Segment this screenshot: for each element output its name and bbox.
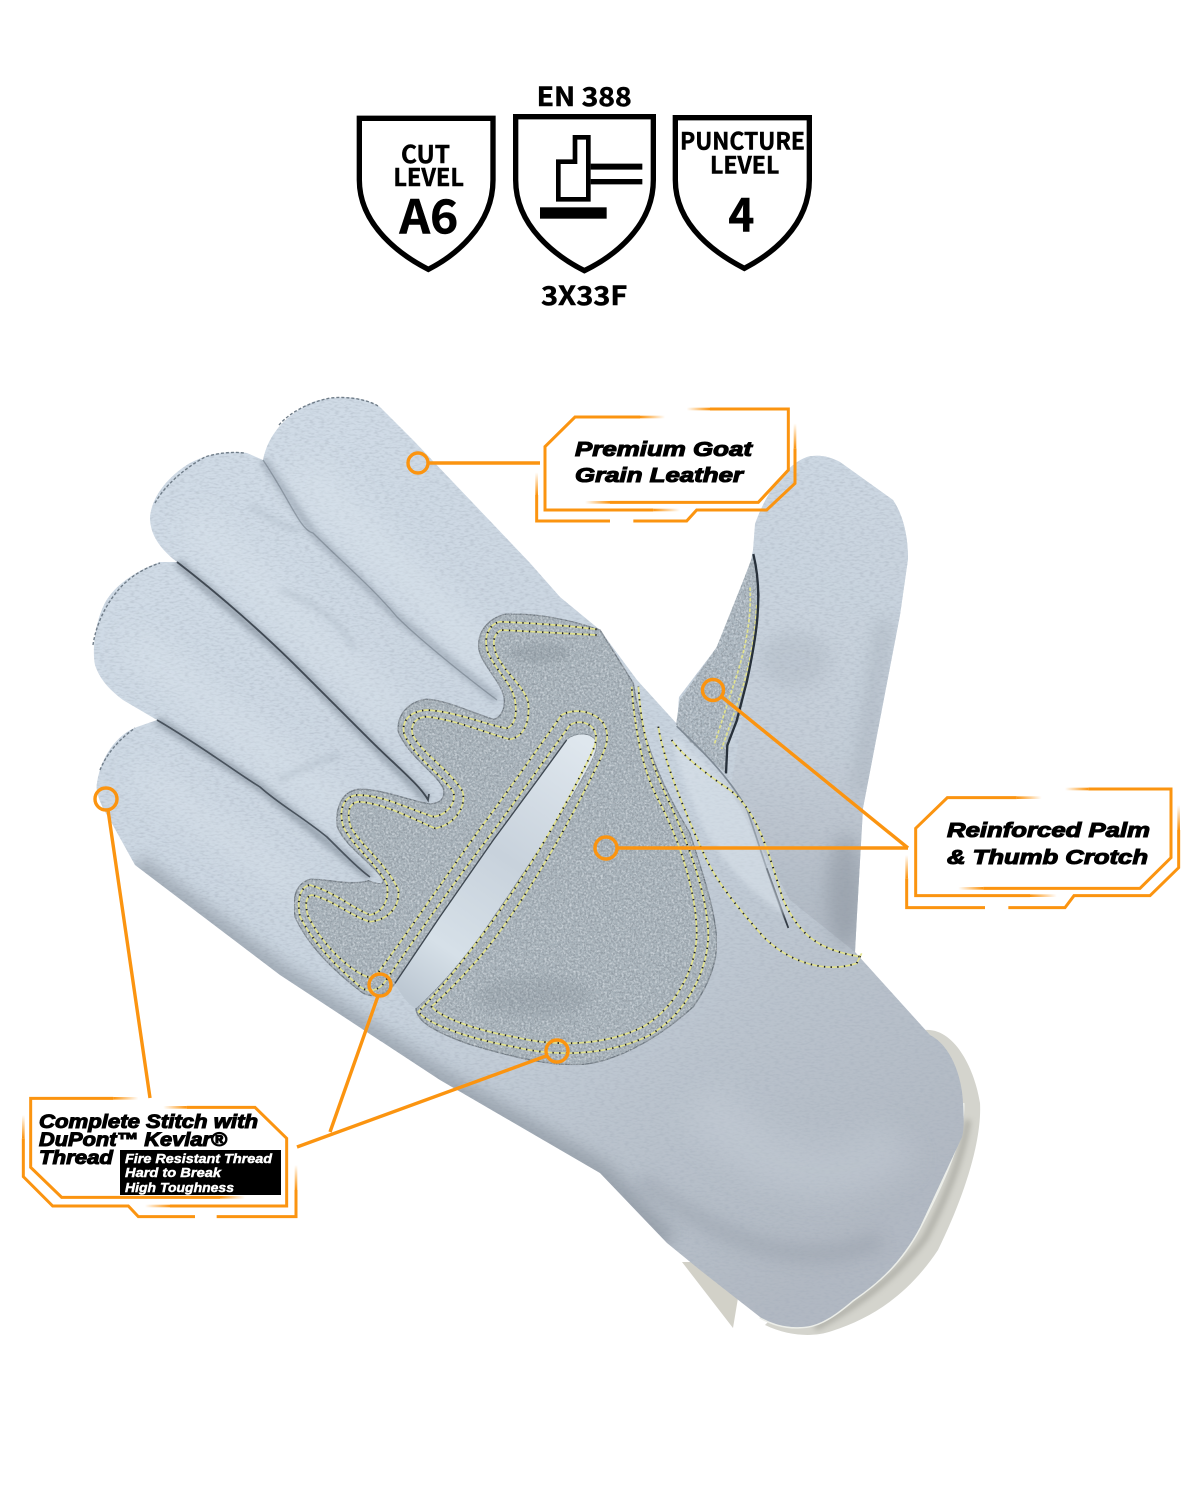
marker: lower patch stitch bbox=[297, 1040, 568, 1147]
marker: palm edge stitch bbox=[330, 974, 391, 1132]
palm reinforcement patch bbox=[294, 614, 862, 1065]
glove cuff and tab bbox=[682, 1030, 980, 1335]
black feature box bbox=[120, 1150, 281, 1195]
glove photo illustration bbox=[93, 397, 980, 1335]
fingertip stitching bbox=[93, 397, 378, 770]
certification shields bbox=[359, 77, 809, 313]
callout: premium goat grain leather: Grain Leather bbox=[575, 465, 745, 487]
callout: premium goat grain leather bbox=[535, 408, 796, 521]
shield: cut level A6: CUT bbox=[401, 135, 450, 170]
glove leather body bbox=[94, 397, 964, 1327]
heading: EN 388: EN 388 bbox=[537, 77, 632, 114]
thumb crotch reinforcement patch bbox=[676, 554, 788, 928]
shield: EN 388 hammer pictogram bbox=[516, 117, 653, 271]
callout: complete stitch with kevlar thread: DuPont™ Kevlar® bbox=[39, 1130, 227, 1151]
slit in palm patch bbox=[395, 734, 596, 1008]
leather shading bbox=[130, 460, 900, 1254]
kevlar stitching bbox=[299, 622, 862, 1053]
shield: puncture level 4: PUNCTURE bbox=[680, 122, 805, 156]
callout: reinforced palm and thumb crotch: Reinforced Palm bbox=[947, 820, 1150, 842]
black feature box: High Toughness bbox=[125, 1180, 234, 1195]
marker: pinky stitch bbox=[95, 788, 150, 1098]
shield: puncture level 4: LEVEL bbox=[710, 146, 779, 180]
shield: cut level A6 bbox=[359, 118, 493, 269]
callout: reinforced palm and thumb crotch: & Thumb Crotch bbox=[947, 847, 1148, 869]
shield: puncture level 4 bbox=[675, 118, 809, 268]
shield: cut level A6: A6 bbox=[398, 180, 458, 247]
black feature box: Fire Resistant Thread bbox=[125, 1151, 273, 1166]
shield: puncture level 4: 4 bbox=[728, 179, 754, 246]
callout: complete stitch with kevlar thread bbox=[22, 1097, 297, 1217]
callout: reinforced palm and thumb crotch bbox=[905, 788, 1180, 908]
leather strip highlight beside patch bbox=[672, 733, 793, 920]
marker: thumb crotch bbox=[702, 680, 908, 848]
callout: complete stitch with kevlar thread: Complete Stitch with bbox=[39, 1112, 258, 1133]
callout: complete stitch with kevlar thread: Thread bbox=[39, 1148, 113, 1169]
callout: premium goat grain leather: Premium Goat bbox=[575, 439, 754, 461]
black feature box: Hard to Break bbox=[125, 1165, 222, 1180]
leader lines and markers bbox=[95, 453, 908, 1147]
shield: cut level A6: LEVEL bbox=[393, 158, 464, 193]
finger seams bbox=[157, 460, 497, 877]
thumb shading bbox=[730, 456, 908, 952]
marker: goat grain leather bbox=[408, 453, 540, 473]
rating code: 3X33F: 3X33F bbox=[541, 276, 627, 313]
marker: reinforced palm bbox=[595, 837, 908, 859]
